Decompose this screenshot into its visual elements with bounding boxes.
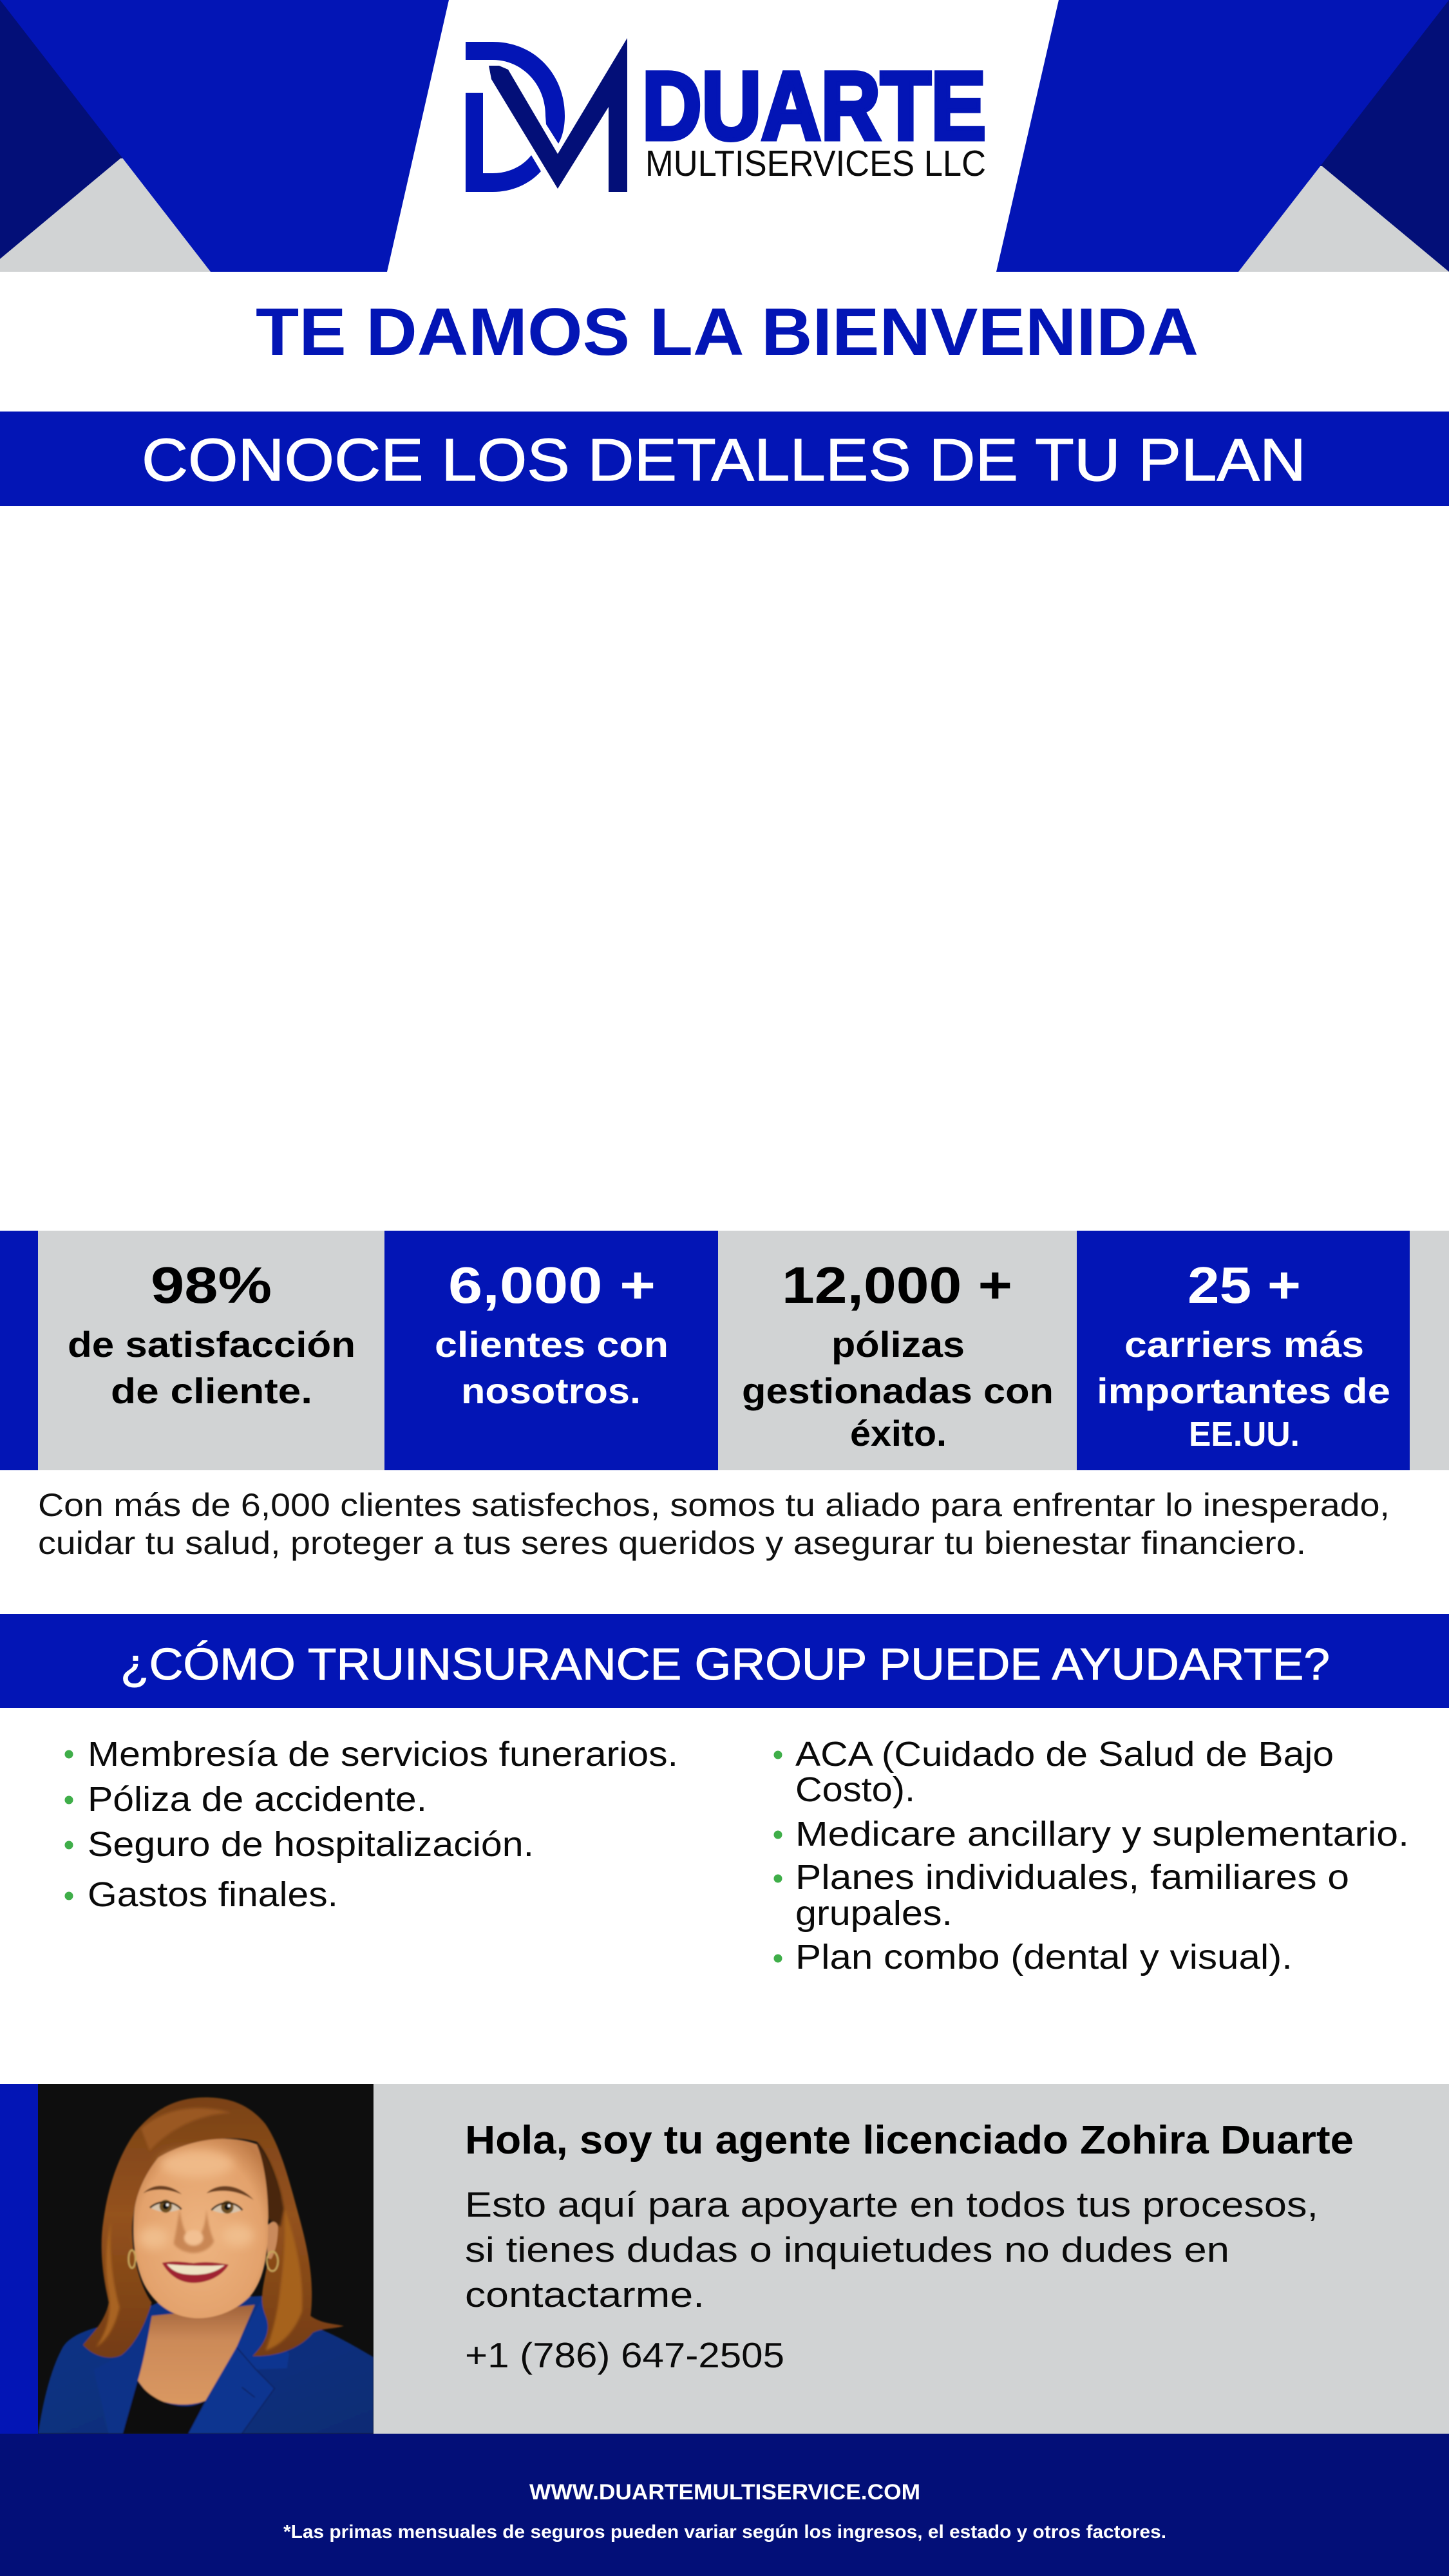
list bullets (774, 1750, 782, 1963)
header right gray triangle (1191, 166, 1449, 272)
services list: right column: grupales. (795, 1894, 952, 1933)
services list: right column: Medicare ancillary y suplementario. (795, 1815, 1409, 1853)
header left blue shape (0, 0, 449, 272)
band heading: ¿CÓMO TRUINSURANCE GROUP PUEDE AYUDARTE? (120, 1639, 1330, 1689)
stat: clients: clientes con (435, 1324, 668, 1365)
stat: satisfaction (38, 1231, 384, 1470)
band: plan details (0, 412, 1449, 506)
services list: left column: Gastos finales. (88, 1875, 338, 1914)
agent portrait (38, 2084, 374, 2434)
agent message: Esto aquí para apoyarte en todos tus procesos, (465, 2184, 1318, 2224)
stat: satisfaction: 98% (151, 1256, 272, 1314)
services list: left column: Póliza de accidente. (88, 1780, 427, 1819)
stat: policies (718, 1231, 1077, 1470)
intro paragraph: cuidar tu salud, proteger a tus seres queridos y asegurar tu bienestar financiero. (38, 1525, 1306, 1561)
services list: left column: Membresía de servicios funerarios. (88, 1735, 678, 1774)
stat: policies: gestionadas con (742, 1370, 1054, 1411)
panel: statistics (0, 1231, 1449, 1470)
header left navy triangle (0, 0, 167, 264)
stat: carriers (1077, 1231, 1410, 1470)
services list: right column: Plan combo (dental y visual). (795, 1938, 1293, 1976)
header right blue shape (996, 0, 1449, 272)
footer (0, 2434, 1449, 2576)
stat: clients: 6,000 + (448, 1256, 656, 1314)
stat: satisfaction: de satisfacción (68, 1324, 355, 1365)
services list: right column: Costo). (795, 1770, 915, 1809)
logo wordmark DUARTE: DUARTE (642, 52, 986, 160)
agent heading: Hola, soy tu agente licenciado Zohira Duarte (465, 2118, 1354, 2163)
stat: policies: pólizas (831, 1324, 965, 1365)
agent phone: +1 (786) 647-2505 (465, 2335, 784, 2375)
footer disclaimer: *Las primas mensuales de seguros pueden variar según los ingresos, el estado y otros factores. (283, 2522, 1166, 2543)
services list: right column (774, 1735, 1409, 1976)
stat: clients: nosotros. (461, 1370, 641, 1411)
agent message: contactarme. (465, 2275, 705, 2315)
logo monogram DM (466, 38, 627, 192)
services list: right column: Planes individuales, familiares o (795, 1858, 1349, 1897)
services list: left column (64, 1735, 678, 1914)
footer website: WWW.DUARTEMULTISERVICE.COM (529, 2480, 920, 2505)
stat: carriers: importantes de (1097, 1370, 1390, 1411)
header left gray triangle (0, 158, 258, 272)
stat: satisfaction: de cliente. (111, 1370, 312, 1411)
logo (466, 38, 986, 192)
stat: policies: éxito. (850, 1413, 947, 1454)
panel: agent (0, 2084, 1449, 2434)
header right navy triangle (1288, 0, 1449, 272)
stat: carriers: carriers más (1124, 1324, 1364, 1365)
intro paragraph: Con más de 6,000 clientes satisfechos, somos tu aliado para enfrentar lo inesperado, (38, 1487, 1390, 1523)
stat: policies: 12,000 + (782, 1256, 1012, 1314)
band heading: CONOCE LOS DETALLES DE TU PLAN (142, 426, 1306, 493)
header banner (0, 0, 1449, 272)
band: how we help (0, 1614, 1449, 1708)
agent message (465, 2184, 1318, 2315)
logo subtitle: MULTISERVICES LLC (645, 143, 986, 184)
services list: left column: Seguro de hospitalización. (88, 1825, 534, 1864)
intro paragraph (38, 1487, 1390, 1561)
stat: carriers: 25 + (1188, 1256, 1301, 1314)
list bullets (64, 1750, 73, 1900)
stat: carriers: EE.UU. (1189, 1415, 1300, 1454)
stat: clients (384, 1231, 718, 1470)
title: TE DAMOS LA BIENVENIDA (256, 295, 1198, 370)
agent message: si tienes dudas o inquietudes no dudes en (465, 2230, 1229, 2269)
services list: right column: ACA (Cuidado de Salud de Bajo (795, 1735, 1334, 1774)
